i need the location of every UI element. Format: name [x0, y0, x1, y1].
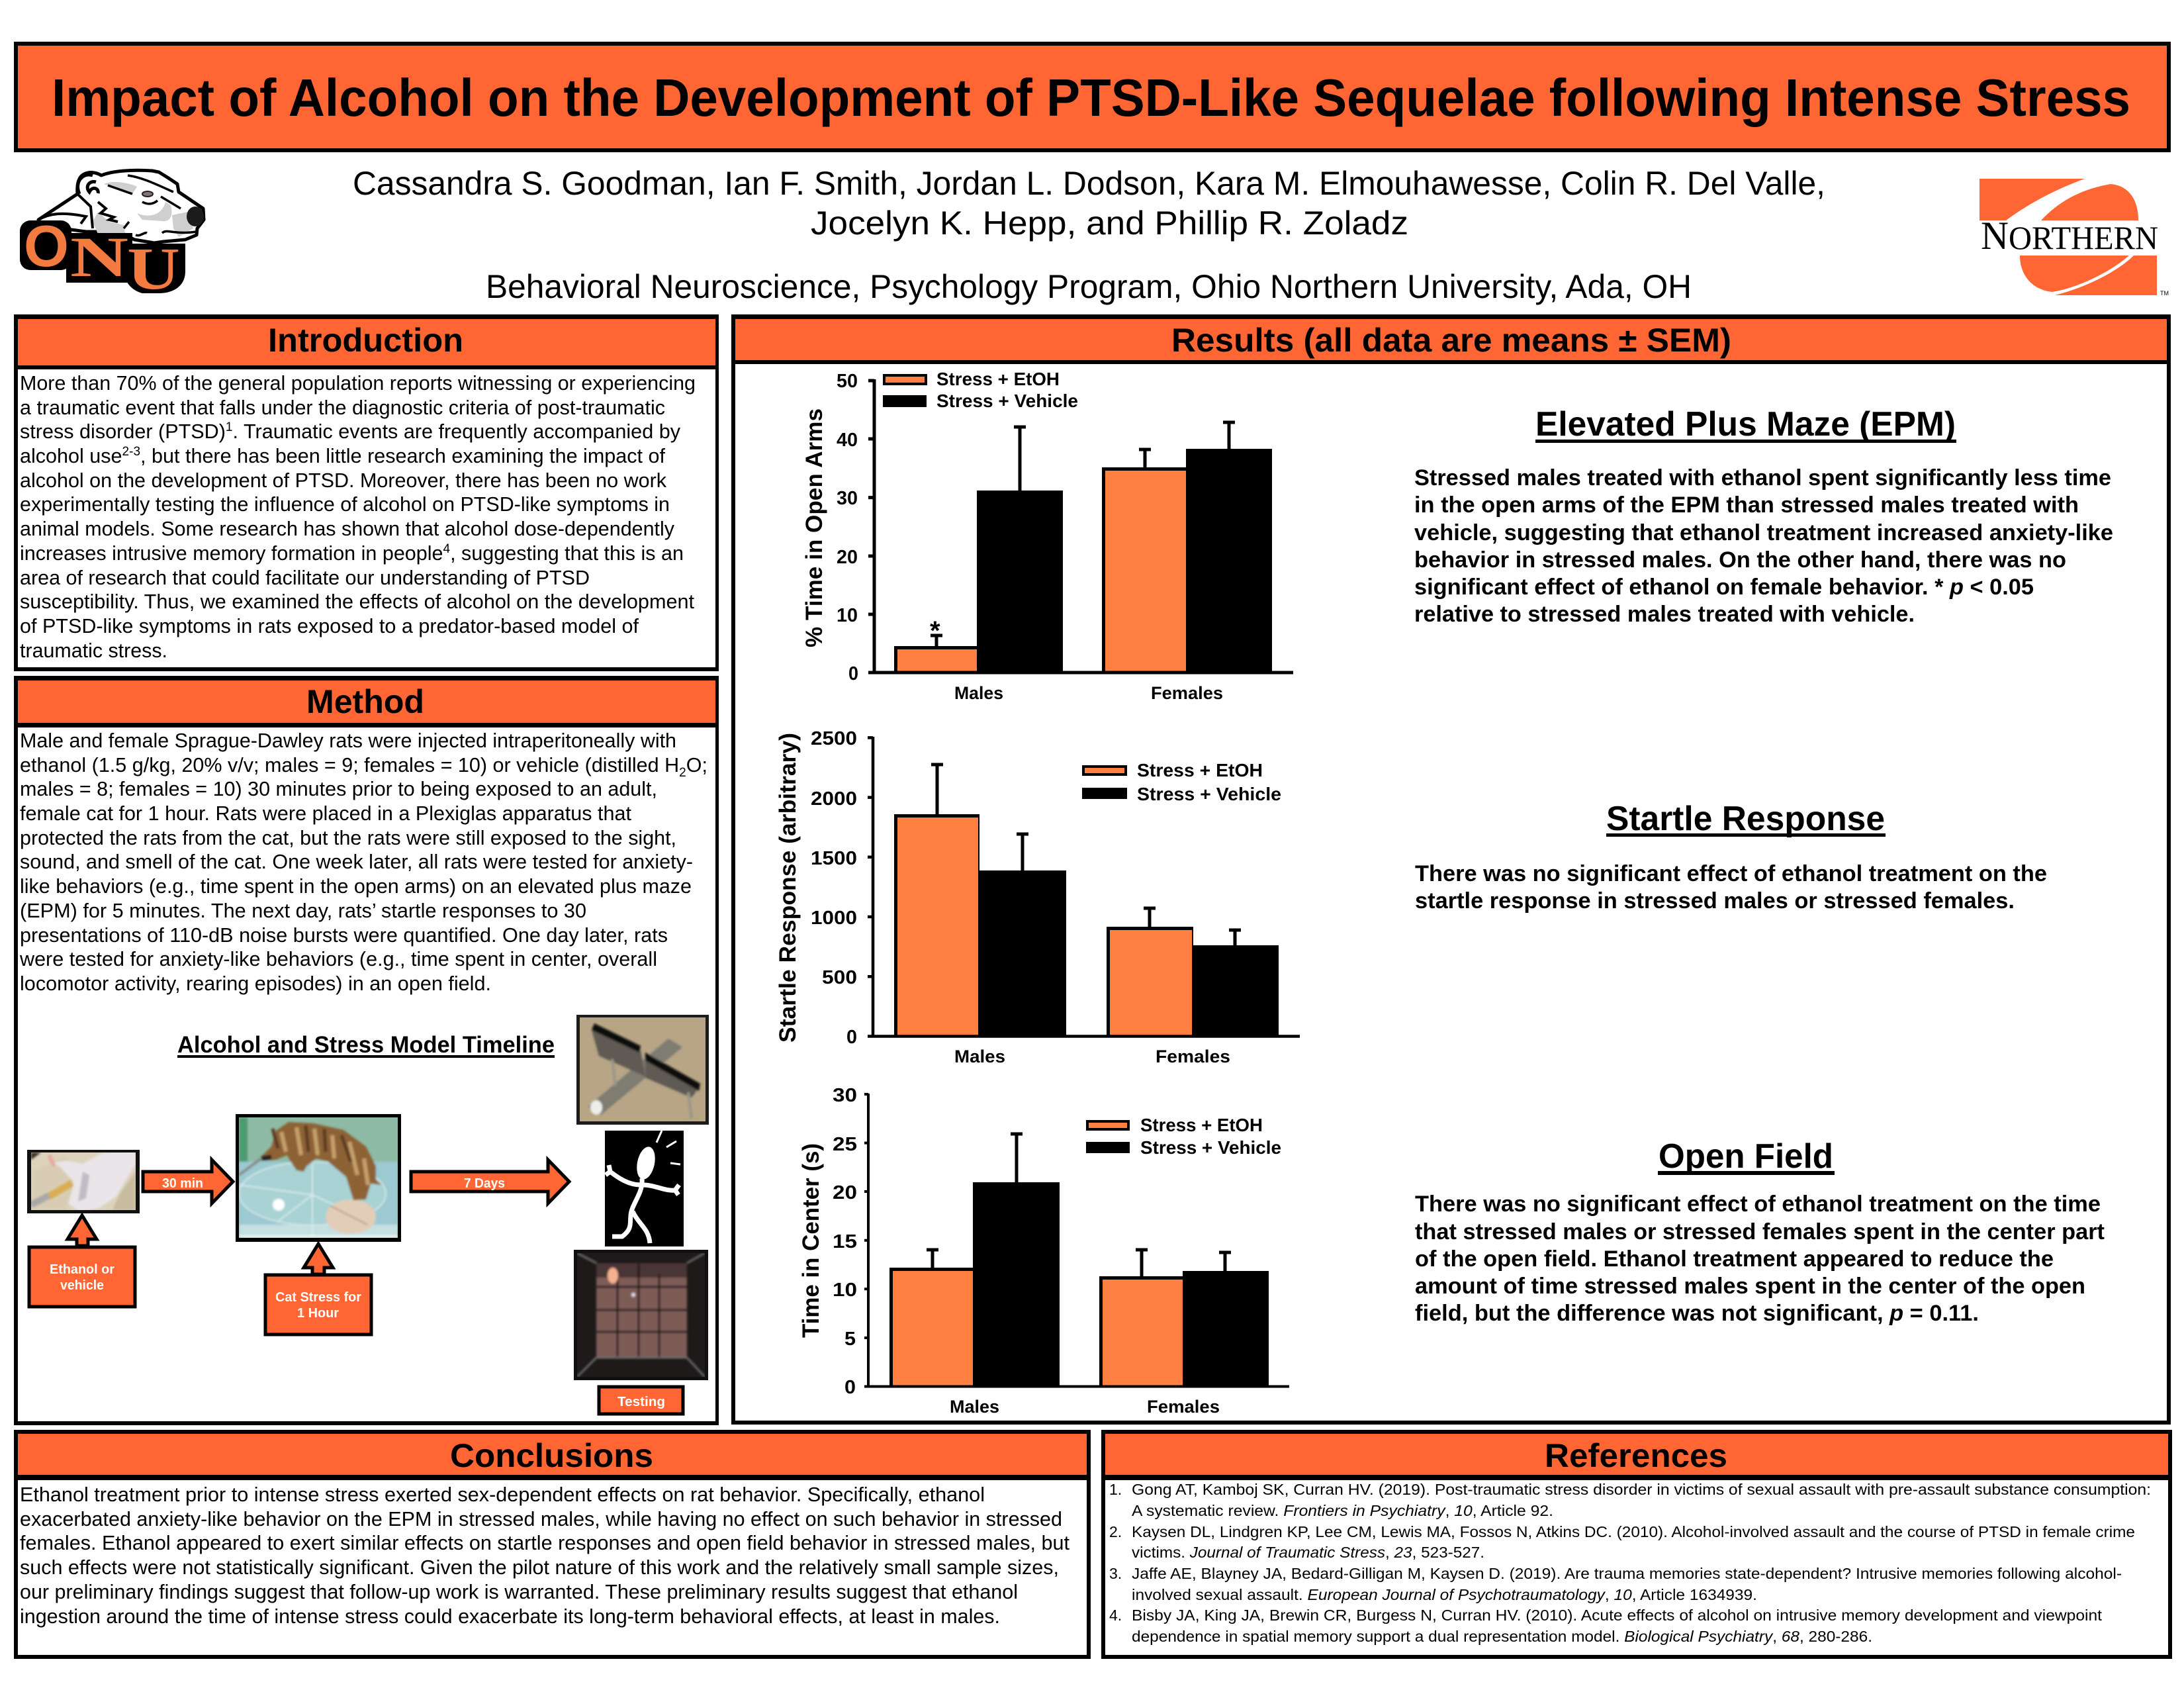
- text block: introduction body: of PTSD-like symptoms in rats exposed to a predator-based model of: [20, 615, 639, 637]
- photo: cat over plexiglas apparatus: [236, 1114, 401, 1242]
- text block: reference list: 3.: [1109, 1565, 1122, 1582]
- text block: reference list: Jaffe AE, Blayney JA, Bedard-Gilligan M, Kaysen D. (2019). Are trauma memories state-dependent? Intrusive memories following alcohol-: [1132, 1565, 2122, 1582]
- chart: startle response: 1000: [811, 908, 857, 929]
- text block: reference list: 1.: [1109, 1481, 1122, 1498]
- text block: introduction body: stress disorder (PTSD): [20, 420, 225, 443]
- chart: percent time in open arms: 0: [848, 663, 858, 684]
- text block: conclusions body: ingestion around the time of intense stress could exacerbate its long-term behavioral effects, at least in males.: [20, 1605, 1000, 1628]
- photo: rat injection: [27, 1150, 140, 1213]
- text block: introduction body: More than 70% of the general population reports witnessing or experiencing: [20, 372, 696, 395]
- icon: startled figure: [605, 1131, 684, 1246]
- text block: startle response: startle response in stressed males or stressed females.: [1415, 888, 2015, 914]
- panel: method: [14, 676, 719, 1425]
- text block: introduction body: , suggesting that this is an: [450, 542, 684, 565]
- text block: open field: field, but the difference was not significant, p = 0.11.: [1415, 1301, 1979, 1326]
- authors and affiliation: Behavioral Neuroscience, Psychology Program, Ohio Northern University, Ada, OH: [486, 268, 1692, 305]
- chart: time in center: 5: [844, 1329, 856, 1350]
- chart: percent time in open arms: 50: [837, 371, 858, 392]
- icon: Northern logo: TM: [2160, 290, 2169, 297]
- text block: introduction body: experimentally testing the influence of alcohol on PTSD-like symptoms in: [20, 493, 670, 516]
- icon: ONU polar bear logo: [20, 170, 204, 302]
- text block: reference list: Bisby JA, King JA, Brewin CR, Burgess N, Curran HV. (2010). Acute effects of alcohol on intrusive memory development and viewpoint: [1132, 1607, 2103, 1624]
- text block: method body: ethanol (1.5 g/kg, 20% v/v; males = 9; females = 10) or vehicle (distilled H: [20, 754, 678, 776]
- legend: Stress + EtOH: [936, 369, 1060, 389]
- callout: cat stress for 1 hour: Cat Stress for: [275, 1290, 361, 1305]
- heading: method: Method: [306, 683, 424, 720]
- text block: reference list: 2.: [1109, 1523, 1122, 1540]
- chart: percent time in open arms: [801, 369, 1293, 703]
- text block: introduction body: susceptibility. Thus, we examined the effects of alcohol on the development: [20, 590, 695, 613]
- legend: [1082, 760, 1281, 804]
- chart: percent time in open arms: 10: [837, 605, 858, 626]
- text block: startle response: [1415, 800, 2047, 914]
- chart: time in center: [798, 1085, 1289, 1417]
- text block: open field: Open Field: [1659, 1137, 1833, 1176]
- authors and affiliation: Cassandra S. Goodman, Ian F. Smith, Jordan L. Dodson, Kara M. Elmouhawesse, Colin R. Del Valle,: [353, 165, 1825, 202]
- text block: method body: 2: [679, 766, 686, 780]
- chart: startle response: 2000: [811, 788, 857, 810]
- text block: introduction body: increases intrusive memory formation in people: [20, 542, 443, 565]
- authors and affiliation: [353, 165, 1825, 305]
- chart: startle response: Females: [1156, 1047, 1230, 1066]
- panel: conclusions: [14, 1430, 1091, 1659]
- text block: reference list: involved sexual assault. European Journal of Psychotraumatology , 10, Article 1634939.: [1132, 1586, 1757, 1603]
- text block: elevated plus maze: relative to stressed males treated with vehicle.: [1414, 602, 1915, 627]
- text block: open field: There was no significant effect of ethanol treatment on the time: [1415, 1192, 2101, 1217]
- text block: reference list: dependence in spatial memory support a dual representation model. Biological Psychiatry , 68, 280-286.: [1132, 1628, 1872, 1645]
- panel: results: [731, 314, 2171, 1425]
- callout: ethanol or vehicle: Ethanol or: [50, 1262, 114, 1277]
- heading: alcohol and stress model timeline: Alcohol and Stress Model Timeline: [177, 1032, 555, 1058]
- text block: introduction body: [20, 372, 696, 662]
- text block: reference list: Kaysen DL, Lindgren KP, Lee CM, Lewis MA, Fossos N, Atkins DC. (2010). Alcohol-involved assault and the course of PTSD in female crime: [1132, 1523, 2135, 1540]
- legend: [883, 369, 1078, 411]
- text block: conclusions body: such effects were not statistically significant. Given the pilot nature of this work and the relatively small sample sizes,: [20, 1556, 1059, 1579]
- chart: percent time in open arms: Females: [1151, 683, 1223, 703]
- chart: startle response: 2500: [811, 728, 857, 749]
- icon: Northern logo: NORTHERN: [1981, 214, 2158, 258]
- callout: cat stress for 1 hour: 1 Hour: [297, 1306, 339, 1321]
- text block: method body: O;: [686, 754, 707, 776]
- text block: reference list: victims. Journal of Traumatic Stress , 23, 523-527.: [1132, 1544, 1484, 1561]
- text block: introduction body: a traumatic event that falls under the diagnostic criteria of post-traumatic: [20, 397, 665, 419]
- arrow: 7 days: [411, 1160, 569, 1203]
- panel: introduction: [14, 314, 719, 671]
- callout: ethanol or vehicle: vehicle: [60, 1278, 104, 1293]
- text block: elevated plus maze: [1414, 405, 2113, 627]
- chart: time in center: 20: [833, 1182, 857, 1203]
- icon: Northern logo: [1979, 179, 2169, 297]
- text block: reference list: [1109, 1481, 2151, 1645]
- chart: time in center: 30: [833, 1085, 857, 1106]
- text block: introduction body: 1: [226, 420, 233, 434]
- text block: elevated plus maze: Stressed males treated with ethanol spent significantly less time: [1414, 465, 2111, 491]
- chart: time in center: 15: [833, 1231, 857, 1252]
- text block: method body: males = 8; females = 10) 30 minutes prior to being exposed to an adult,: [20, 778, 657, 800]
- chart: percent time in open arms: *: [930, 616, 940, 645]
- text block: conclusions body: females. Ethanol appeared to exert similar effects on startle responses and open field behavior in stressed males, but: [20, 1532, 1070, 1554]
- title banner: Impact of Alcohol on the Development of PTSD-Like Sequelae following Intense Stress: [52, 68, 2130, 127]
- heading: introduction: Introduction: [268, 322, 463, 359]
- text block: elevated plus maze: vehicle, suggesting that ethanol treatment increased anxiety-like: [1414, 520, 2113, 545]
- legend: Stress + EtOH: [1140, 1115, 1263, 1135]
- title banner: [14, 42, 2171, 152]
- text block: method body: (EPM) for 5 minutes. The next day, rats’ startle responses to 30: [20, 900, 586, 922]
- chart: startle response: 500: [822, 967, 857, 988]
- text block: elevated plus maze: in the open arms of the EPM than stressed males treated with: [1414, 492, 2079, 518]
- chart: percent time in open arms: % Time in Open Arms: [801, 408, 827, 647]
- panel: references: [1101, 1430, 2172, 1659]
- text block: method body: locomotor activity, rearing episodes) in an open field.: [20, 972, 491, 995]
- text block: method body: Male and female Sprague-Dawley rats were injected intraperitoneally with: [20, 729, 676, 752]
- text block: elevated plus maze: significant effect of ethanol on female behavior. * p < 0.05: [1414, 575, 2034, 600]
- text block: open field: amount of time stressed males spent in the center of the open: [1415, 1274, 2085, 1299]
- text block: introduction body: , but there has been little research examining the impact of: [140, 445, 666, 467]
- text block: method body: female cat for 1 hour. Rats were placed in a Plexiglas apparatus that: [20, 802, 632, 825]
- photo: elevated plus maze: [576, 1015, 709, 1125]
- text block: conclusions body: exacerbated anxiety-like behavior on the EPM in stressed males, while having no effect on such behavior in stressed: [20, 1508, 1062, 1530]
- text block: conclusions body: our preliminary findings suggest that follow-up work is warranted. These preliminary results suggest that ethanol: [20, 1581, 1018, 1603]
- text block: introduction body: . Traumatic events are frequently accompanied by: [233, 420, 681, 443]
- chart: startle response: Startle Response (arbitrary): [775, 733, 801, 1043]
- text block: method body: protected the rats from the cat, but the rats were still exposed to the sight,: [20, 827, 676, 849]
- legend: Stress + Vehicle: [1140, 1137, 1281, 1158]
- icon: ONU polar bear logo: O: [24, 213, 69, 279]
- heading: results: Results (all data are means ± SEM): [1171, 322, 1731, 359]
- callout: testing: Testing: [617, 1395, 665, 1409]
- legend: Stress + Vehicle: [936, 391, 1078, 411]
- chart: time in center: 0: [844, 1377, 856, 1398]
- chart: startle response: 1500: [811, 848, 857, 869]
- chart: time in center: Females: [1147, 1397, 1220, 1417]
- text block: open field: [1415, 1137, 2105, 1326]
- text block: method body: [19, 729, 707, 995]
- text block: reference list: 4.: [1109, 1607, 1122, 1624]
- chart: time in center: Time in Center (s): [798, 1143, 824, 1338]
- text block: reference list: A systematic review. Frontiers in Psychiatry , 10, Article 92.: [1132, 1502, 1553, 1519]
- text block: introduction body: 4: [443, 542, 451, 556]
- text block: method body: sound, and smell of the cat. One week later, all rats were tested for anxiety-: [20, 851, 693, 873]
- chart: percent time in open arms: 40: [837, 430, 858, 451]
- text block: introduction body: animal models. Some research has shown that alcohol dose-dependently: [20, 518, 675, 540]
- chart: time in center: 10: [833, 1280, 857, 1301]
- text block: introduction body: alcohol on the development of PTSD. Moreover, there has been no work: [20, 469, 667, 492]
- text block: introduction body: area of research that could facilitate our understanding of PTSD: [20, 567, 590, 589]
- text block: startle response: Startle Response: [1606, 800, 1885, 838]
- chart: percent time in open arms: 20: [837, 547, 858, 568]
- icon: ONU polar bear logo: N: [70, 225, 128, 289]
- legend: [1086, 1115, 1281, 1158]
- text block: method body: presentations of 110-dB noise bursts were quantified. One day later, rats: [20, 924, 668, 947]
- callout: cat stress for 1 hour: [265, 1244, 371, 1335]
- chart: startle response: [775, 728, 1300, 1066]
- callout: testing: [599, 1387, 683, 1414]
- chart: percent time in open arms: 30: [837, 488, 858, 509]
- text block: method body: like behaviors (e.g., time spent in the open arms) on an elevated plus maze: [20, 875, 692, 898]
- icon: ONU polar bear logo: U: [127, 236, 180, 302]
- text block: introduction body: traumatic stress.: [20, 639, 167, 662]
- chart: time in center: 25: [833, 1134, 857, 1155]
- text block: open field: that stressed males or stressed females spent in the center part: [1415, 1219, 2105, 1244]
- arrow: 30 min: 30 min: [162, 1176, 203, 1191]
- heading: conclusions: Conclusions: [450, 1437, 653, 1474]
- text block: conclusions body: Ethanol treatment prior to intense stress exerted sex-dependent effects on rat behavior. Specifically, ethanol: [20, 1483, 985, 1506]
- chart: time in center: Males: [950, 1397, 999, 1417]
- arrow: 7 days: 7 Days: [464, 1176, 505, 1191]
- chart: startle response: 0: [846, 1027, 857, 1048]
- chart: startle response: Males: [954, 1047, 1005, 1066]
- photo: open field arena: [574, 1250, 708, 1380]
- callout: ethanol or vehicle: [29, 1215, 135, 1307]
- text block: method body: were tested for anxiety-like behaviors (e.g., time spent in center, overall: [19, 948, 657, 970]
- heading: references: References: [1545, 1437, 1727, 1474]
- legend: Stress + EtOH: [1137, 760, 1263, 780]
- text block: introduction body: 2-3: [122, 445, 140, 459]
- text block: open field: of the open field. Ethanol treatment appeared to reduce the: [1415, 1246, 2054, 1272]
- authors and affiliation: Jocelyn K. Hepp, and Phillip R. Zoladz: [811, 205, 1408, 242]
- arrow: 30 min: [143, 1160, 233, 1203]
- chart: percent time in open arms: Males: [954, 683, 1003, 703]
- text block: startle response: There was no significant effect of ethanol treatment on the: [1415, 861, 2047, 886]
- text block: conclusions body: [20, 1483, 1070, 1628]
- text block: elevated plus maze: Elevated Plus Maze (EPM): [1535, 405, 1956, 444]
- text block: reference list: Gong AT, Kamboj SK, Curran HV. (2019). Post-traumatic stress disorder in victims of sexual assault with pre-assault substance consumption:: [1132, 1481, 2151, 1498]
- text block: introduction body: alcohol use: [20, 445, 122, 467]
- text block: elevated plus maze: behavior in stressed males. On the other hand, there was no: [1414, 547, 2066, 573]
- legend: Stress + Vehicle: [1137, 784, 1281, 804]
